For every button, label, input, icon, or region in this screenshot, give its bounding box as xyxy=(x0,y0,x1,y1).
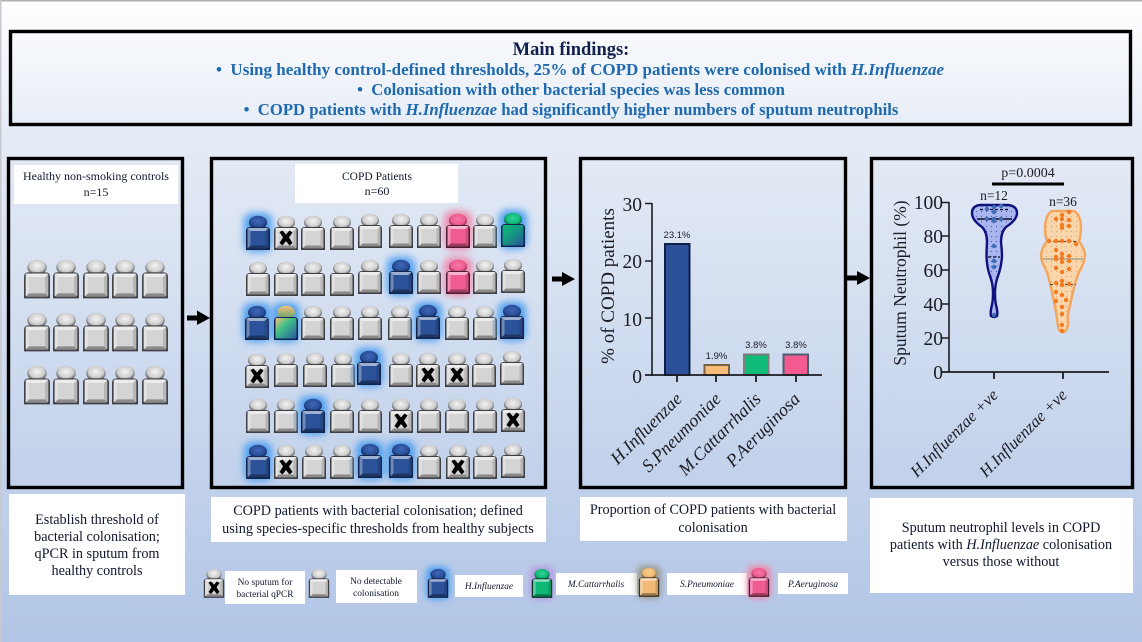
row 3 xyxy=(243,302,526,342)
legend: no sputum: No sputum for xyxy=(238,577,293,588)
legend: H.Influenzae: H.Influenzae xyxy=(464,581,513,592)
violin chart xyxy=(890,166,1109,482)
legend: M.Cattarrhalis: M.Cattarrhalis xyxy=(567,580,625,590)
legend: no colonisation xyxy=(309,569,417,603)
bar chart xyxy=(598,195,822,480)
row 6 xyxy=(244,441,525,481)
finding 1: • Using healthy control-defined thresholds, 25% of COPD patients were colonised with H.Influenzae xyxy=(216,60,944,79)
sample sizes: n=12 xyxy=(980,188,1008,203)
bar chart: 0 xyxy=(632,367,642,388)
caption: proportion: Proportion of COPD patients with bacterial xyxy=(590,502,836,518)
y axis xyxy=(645,203,652,376)
bar: P.Aeruginosa: 3.8% xyxy=(785,340,807,351)
category labels: P.Aeruginosa xyxy=(721,389,804,472)
y axis xyxy=(942,202,949,372)
violin chart: 40 xyxy=(924,295,943,316)
caption: healthy controls xyxy=(9,494,185,595)
bar: S.Pneumoniae xyxy=(704,351,729,375)
sample sizes: n=36 xyxy=(1049,194,1077,209)
caption: neutrophils xyxy=(870,498,1133,593)
bar: H.Influenzae xyxy=(664,230,691,375)
legend: S.Pneumoniae: S.Pneumoniae xyxy=(680,580,734,590)
category labels: S.Pneumoniae xyxy=(638,389,725,476)
panel: proportion bar chart xyxy=(580,158,846,488)
legend: M.Cattarrhalis xyxy=(530,566,637,600)
arrow: patients to proportions xyxy=(552,272,575,286)
healthy heading xyxy=(14,165,178,204)
violin chart: 60 xyxy=(924,261,943,282)
patients heading: COPD Patients xyxy=(342,171,413,183)
caption: neutrophils: patients with H.Influenzae colonisation xyxy=(890,537,1112,553)
y axis title: Sputum Neutrophil (%) xyxy=(890,200,910,366)
x axis xyxy=(645,375,822,382)
bar chart: 10 xyxy=(622,310,642,331)
panel: main findings xyxy=(10,32,1130,124)
legend: no sputum xyxy=(204,569,305,604)
y axis title: % of COPD patients xyxy=(598,208,619,364)
bar: M.Cattarrhalis xyxy=(744,340,768,375)
bar: S.Pneumoniae: 1.9% xyxy=(706,351,728,362)
caption: COPD patients: COPD patients with bacterial colonisation; defined xyxy=(233,503,523,519)
legend: P.Aeruginosa: P.Aeruginosa xyxy=(787,580,838,590)
violin chart: 20 xyxy=(924,329,943,350)
panel: neutrophil violin plot xyxy=(872,158,1132,488)
caption: COPD patients: using species-specific thresholds from healthy subjects xyxy=(222,521,534,537)
group labels: H.Influenzae +ve xyxy=(906,385,1002,482)
bar chart: 20 xyxy=(622,252,642,273)
bar chart: 30 xyxy=(622,195,642,216)
legend: P.Aeruginosa xyxy=(747,565,848,599)
violin chart: 100 xyxy=(914,193,943,214)
category labels xyxy=(606,389,804,480)
sample sizes xyxy=(980,188,1077,209)
legend: S.Pneumoniae xyxy=(637,565,747,599)
caption: neutrophils: versus those without xyxy=(943,554,1059,570)
arrow: proportions to neutrophils xyxy=(847,271,870,285)
caption: healthy controls: qPCR in sputum from xyxy=(35,546,159,562)
caption: healthy controls: Establish threshold of xyxy=(35,512,159,528)
caption: proportion: colonisation xyxy=(678,520,748,536)
patients grid xyxy=(243,210,527,481)
group labels: H.Influenzae +ve xyxy=(975,385,1071,482)
significance bracket xyxy=(992,166,1064,186)
row 1 xyxy=(244,210,527,252)
bar: H.Influenzae: 23.1% xyxy=(664,230,691,241)
bar: P.Aeruginosa xyxy=(784,340,808,375)
violin: positive group xyxy=(972,204,1017,317)
healthy heading: n=15 xyxy=(84,185,108,199)
violin chart: 0 xyxy=(933,363,943,384)
caption: healthy controls: bacterial colonisation; xyxy=(34,529,160,545)
caption: neutrophils: Sputum neutrophil levels in COPD xyxy=(902,520,1100,536)
row 5 xyxy=(246,396,525,435)
legend xyxy=(204,565,848,604)
patients heading: n=60 xyxy=(365,184,389,198)
caption: healthy controls: healthy controls xyxy=(51,563,143,579)
legend: no colonisation: colonisation xyxy=(353,589,399,599)
legend: H.Influenzae xyxy=(426,566,523,600)
heading: main findings: Main findings: xyxy=(513,40,629,60)
legend: no sputum: bacterial qPCR xyxy=(236,590,294,600)
finding 3: • COPD patients with H.Influenzae had significantly higher numbers of sputum neutrophils xyxy=(244,100,899,119)
violin chart: 80 xyxy=(924,227,943,248)
bar: M.Cattarrhalis: 3.8% xyxy=(745,340,767,351)
row 2 xyxy=(246,257,525,296)
row 4 xyxy=(245,348,524,388)
category labels: H.Influenzae xyxy=(606,389,686,469)
arrow: controls to patients xyxy=(187,310,210,325)
finding 2: • Colonisation with other bacterial species was less common xyxy=(357,80,786,99)
violin: negative group xyxy=(1041,210,1085,333)
patients heading xyxy=(295,164,458,203)
panel: healthy controls xyxy=(8,158,182,488)
healthy subjects grid xyxy=(24,260,168,404)
category labels: M.Cattarrhalis xyxy=(673,389,765,480)
caption: proportion xyxy=(580,497,847,541)
legend: no colonisation: No detectable xyxy=(350,577,402,587)
group labels xyxy=(906,385,1071,482)
healthy heading: Healthy non-smoking controls xyxy=(23,169,169,183)
panel: COPD patients xyxy=(212,158,546,488)
significance bracket: p=0.0004 xyxy=(1001,166,1055,181)
caption: COPD patients xyxy=(211,497,546,542)
x axis xyxy=(942,372,1109,379)
